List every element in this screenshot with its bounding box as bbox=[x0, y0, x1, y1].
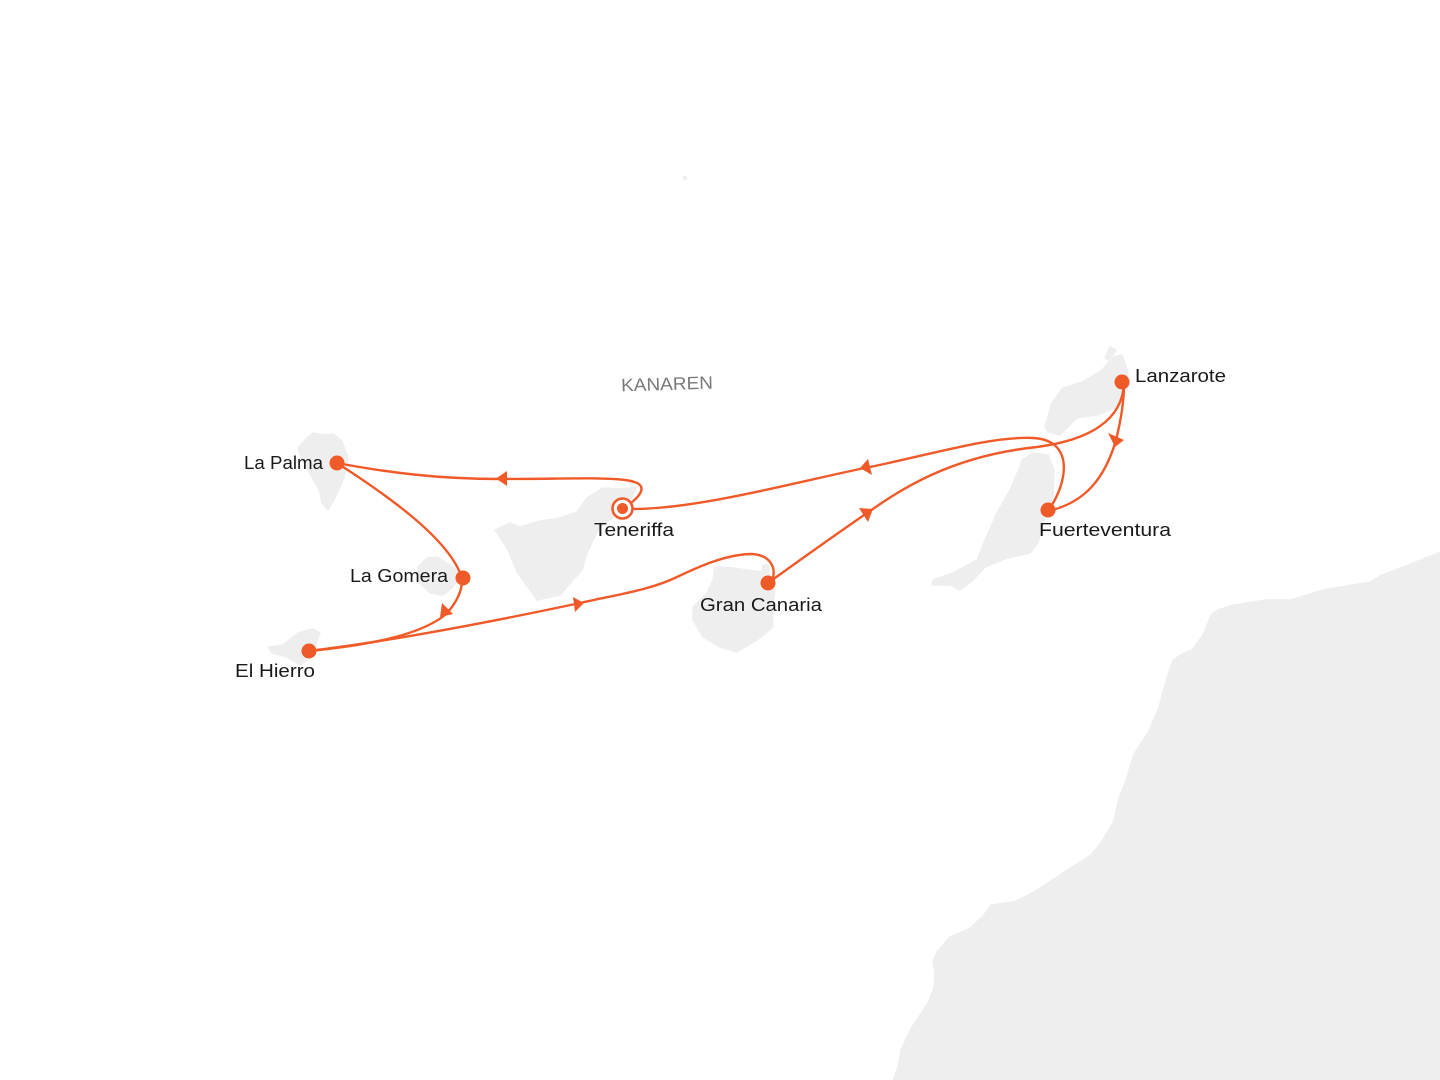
land: small islet north bbox=[684, 176, 686, 180]
port: La Gomera bbox=[456, 570, 470, 586]
island: Fuerteventura bbox=[932, 453, 1054, 590]
port: Lanzarote bbox=[1114, 374, 1130, 390]
route: El Hierro to Gran Canaria bbox=[309, 554, 774, 651]
island: Lanzarote bbox=[1045, 347, 1128, 435]
label: La Gomera: La Gomera bbox=[350, 566, 449, 586]
route: Teneriffa to La Palma bbox=[337, 463, 642, 503]
route: Gran Canaria to Lanzarote bbox=[768, 384, 1124, 583]
label: Teneriffa: Teneriffa bbox=[594, 520, 675, 540]
route: Lanzarote to Fuerteventura bbox=[1048, 384, 1124, 511]
port: Fuerteventura bbox=[1040, 502, 1056, 518]
port: Gran Canaria bbox=[760, 576, 776, 590]
island: Gran Canaria bbox=[693, 565, 775, 652]
label: El Hierro: El Hierro bbox=[235, 661, 315, 681]
label: La Palma: La Palma bbox=[244, 453, 324, 473]
label: Fuerteventura: Fuerteventura bbox=[1039, 520, 1172, 540]
label: region name: KANAREN bbox=[621, 373, 713, 395]
island: El Hierro bbox=[268, 629, 320, 665]
island: La Gomera bbox=[418, 557, 460, 595]
arrow: toward Gran Canaria bbox=[573, 597, 584, 612]
port: La Palma bbox=[330, 456, 344, 470]
start port: Teneriffa bbox=[612, 498, 632, 518]
label: Gran Canaria: Gran Canaria bbox=[700, 595, 823, 615]
land: African coast bbox=[893, 552, 1440, 1080]
arrow: toward Fuerteventura bbox=[1108, 433, 1124, 447]
arrow: toward El Hierro bbox=[440, 603, 453, 617]
label: Lanzarote: Lanzarote bbox=[1135, 366, 1226, 386]
arrow: toward Lanzarote bbox=[859, 508, 873, 522]
arrow: toward La Palma bbox=[496, 471, 507, 486]
route: La Palma via La Gomera to El Hierro bbox=[309, 463, 462, 651]
island: Teneriffa bbox=[495, 487, 637, 600]
route: Fuerteventura to Teneriffa bbox=[632, 438, 1064, 511]
port: El Hierro bbox=[302, 644, 316, 658]
arrow: toward Teneriffa bbox=[860, 459, 872, 475]
island: La Palma bbox=[298, 433, 348, 510]
